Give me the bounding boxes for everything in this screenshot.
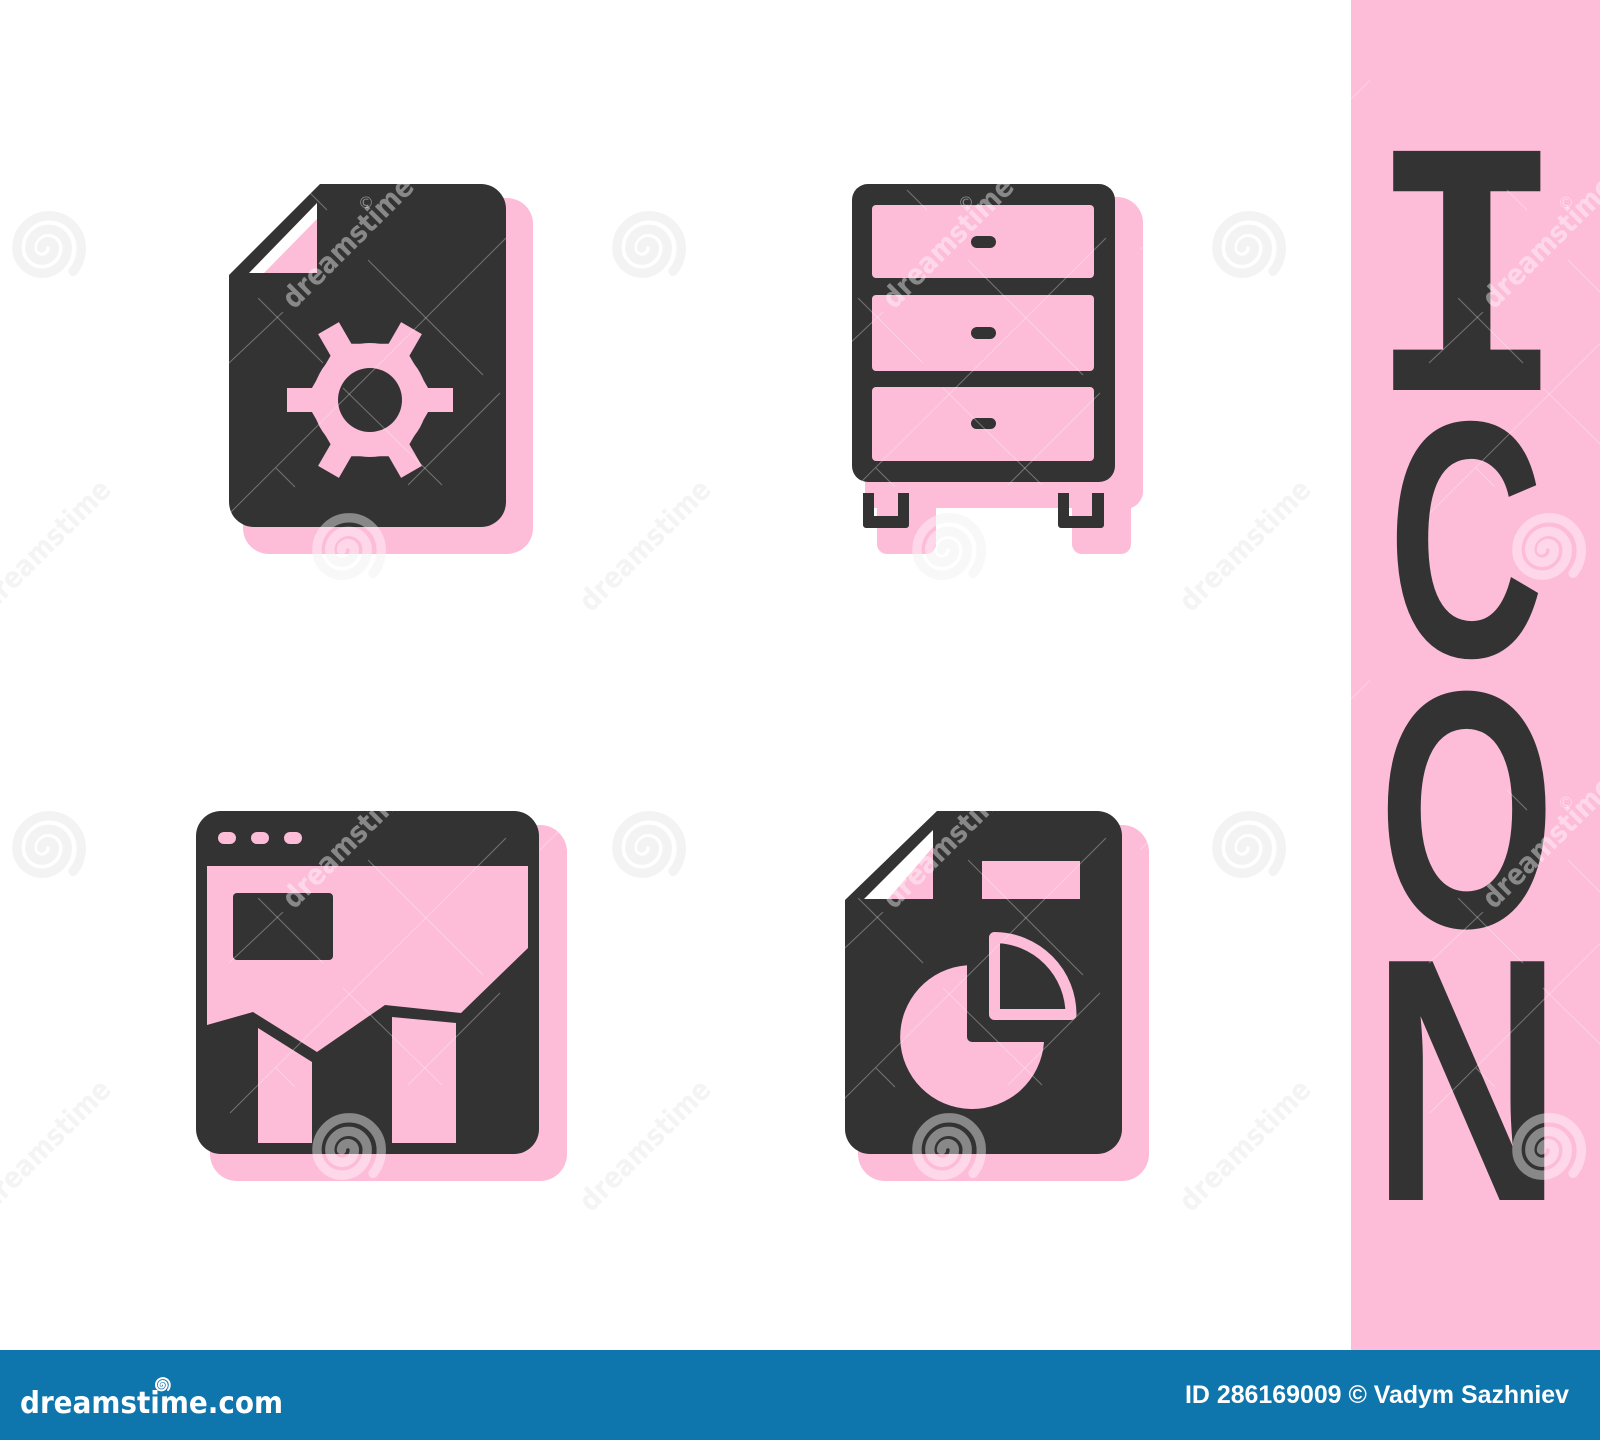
- faint watermark on white: dreamstime: [1172, 1072, 1318, 1218]
- icon: document with gear: [229, 184, 533, 554]
- pie slice outline: [994, 938, 1071, 1014]
- watermark text: dreamstime: [275, 169, 421, 315]
- dark label box: [233, 893, 333, 960]
- cabinet body: [852, 184, 1115, 482]
- credit text: ID 286169009 © Vadym Sazhniev: [1185, 1381, 1569, 1409]
- icon: chest of drawers: [852, 184, 1143, 554]
- right leg: [1058, 493, 1104, 528]
- title bar: [982, 861, 1080, 899]
- drawer 2: [872, 295, 1094, 371]
- gear: [287, 322, 453, 478]
- folded corner: [249, 203, 317, 273]
- watermark text: ©: [1558, 793, 1574, 812]
- logo: dreamstime.com: [20, 1386, 283, 1421]
- watermark text: ©: [358, 793, 374, 812]
- watermark lines: [20, 0, 1600, 1113]
- right bar: [392, 1017, 456, 1143]
- letter N: N: [1371, 887, 1562, 1274]
- faint watermark on white: dreamstime: [572, 472, 718, 618]
- document body: [845, 811, 1122, 1154]
- watermark text: ©: [1558, 193, 1574, 212]
- document body: [229, 184, 506, 527]
- icon shadow: [858, 825, 1149, 1181]
- letter I: I: [1368, 89, 1565, 500]
- watermark text: ©: [358, 193, 374, 212]
- left bar: [258, 1028, 312, 1143]
- window dots: [218, 832, 302, 844]
- icon shadow: [243, 198, 533, 554]
- folded corner: [864, 830, 933, 899]
- watermark text: dreamstime: [875, 169, 1021, 315]
- watermark text: ©: [958, 193, 974, 212]
- drawer 1: [872, 205, 1094, 278]
- drawer 3: [872, 387, 1094, 461]
- chart area: [207, 866, 528, 1052]
- watermark text: ©: [958, 793, 974, 812]
- letter C: C: [1388, 351, 1544, 727]
- left leg: [863, 493, 909, 528]
- watermark text: [275, 169, 1600, 915]
- faint watermark on white: [0, 216, 1318, 1218]
- letter O: O: [1378, 621, 1555, 998]
- watermark text: dreamstime: [875, 769, 1021, 915]
- window body: [196, 811, 539, 1154]
- icon shadow: [210, 825, 567, 1181]
- faint watermark on white: dreamstime: [1172, 472, 1318, 618]
- icon: document with pie chart: [845, 811, 1149, 1181]
- icon: browser window with chart: [196, 811, 567, 1181]
- watermark spirals: [317, 518, 1581, 1175]
- panel: pink ICON sidebar: [1351, 0, 1600, 1350]
- pie chart: [900, 965, 1044, 1109]
- footer bar: [0, 1350, 1600, 1440]
- watermark text: dreamstime: [275, 769, 421, 915]
- icon shadow: [865, 197, 1143, 554]
- faint watermark on white: dreamstime: [572, 1072, 718, 1218]
